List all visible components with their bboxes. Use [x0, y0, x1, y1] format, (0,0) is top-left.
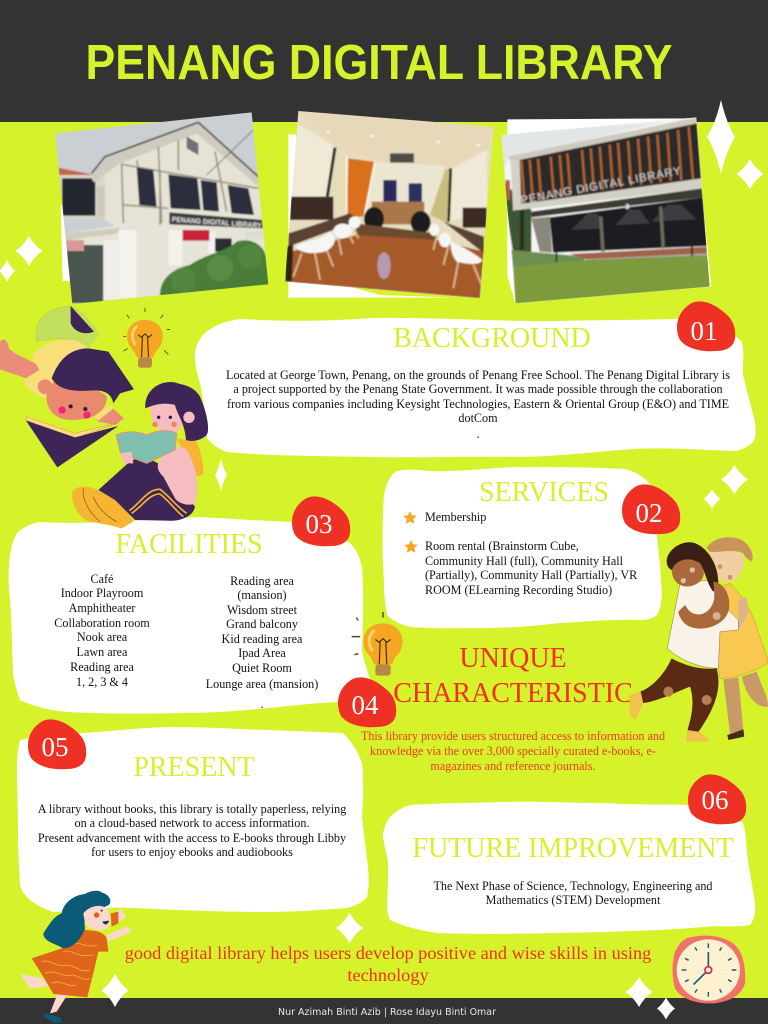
facilities list: column one: 1, 2, 3 & 4 [76, 675, 128, 689]
badge: 03: 03 [306, 509, 332, 539]
heading: unique characteristic: CHARACTERISTIC [393, 678, 633, 709]
present paragraph [38, 802, 347, 859]
background paragraph [226, 368, 730, 441]
background paragraph: dotCom [458, 411, 498, 425]
panel: unique characteristic [361, 643, 665, 773]
facilities list: column one: Collaboration room [54, 616, 150, 630]
panel: services [382, 467, 662, 628]
heading: unique characteristic [393, 643, 633, 709]
illustration: children reading [0, 306, 208, 528]
girl sitting with book [72, 382, 208, 528]
facilities list: column two: Lounge area (mansion) [206, 677, 318, 691]
closing message [125, 943, 651, 985]
service: room rental: Room rental (Brainstorm Cube, [425, 539, 579, 553]
badge: 02 [622, 484, 680, 534]
heading: background: BACKGROUND [393, 323, 591, 354]
facilities list: column two: Quiet Room [232, 661, 292, 675]
heading: future improvement: FUTURE IMPROVEMENT [412, 833, 734, 864]
present paragraph: for users to enjoy ebooks and audiobooks [91, 845, 293, 859]
unique characteristic paragraph [361, 729, 665, 773]
icon: lightbulb [352, 612, 403, 676]
closing message: technology [347, 965, 429, 985]
icon: clock [672, 936, 745, 1003]
facilities list: column two: Ipad Area [238, 646, 286, 660]
service: room rental [425, 539, 638, 597]
facilities list: column two: Wisdom street [227, 603, 298, 617]
badge: 02: 02 [636, 498, 662, 528]
photo: interior room [285, 111, 494, 298]
facilities list: column one: Reading area [70, 660, 134, 674]
panel: present [17, 727, 369, 912]
future improvement paragraph: The Next Phase of Science, Technology, Engineering and [434, 879, 712, 893]
panel: background [195, 318, 756, 457]
friend in yellow dress [707, 537, 768, 740]
panel: future improvement [383, 802, 755, 934]
icon: star bullet [403, 511, 417, 524]
heading: present: PRESENT [133, 752, 255, 783]
badge: 01: 01 [690, 316, 718, 346]
facilities list: column one: Lawn area [77, 645, 128, 659]
future improvement paragraph: Mathematics (STEM) Development [486, 893, 661, 907]
photo: modern library exterior: 3 [625, 202, 629, 211]
badge: 05: 05 [42, 732, 68, 762]
service: membership: Membership [425, 510, 486, 524]
service: room rental: Community Hall (full), Community Hall [425, 554, 624, 568]
friend in white shirt [629, 542, 748, 742]
facilities list: column one: Indoor Playroom [61, 586, 144, 600]
facilities list: column one: Café [91, 572, 113, 586]
boy lying with book [0, 306, 134, 467]
badge: 06 [688, 774, 746, 824]
future improvement paragraph [434, 879, 712, 907]
closing message: good digital library helps users develop positive and wise skills in using [125, 943, 651, 963]
present paragraph: A library without books, this library is totally paperless, relying [38, 802, 346, 816]
facilities list: column two: . [260, 697, 264, 711]
heading: services: SERVICES [479, 477, 609, 508]
title: PENANG DIGITAL LIBRARY [86, 36, 672, 90]
present paragraph: on a cloud-based network to access information. [75, 816, 309, 830]
panel: facilities [8, 517, 370, 714]
unique characteristic paragraph: knowledge via the over 3,000 specially curated e-books, e- [370, 744, 656, 758]
background paragraph: from various companies including Keysight Technologies, Eastern & Oriental Group (E&O) and TIME [227, 397, 729, 411]
service: room rental: ROOM (ELearning Recording Studio) [425, 583, 612, 597]
heading: unique characteristic: UNIQUE [459, 643, 567, 674]
sign text: PENANG DIGITAL LIBRARY [172, 215, 262, 230]
illustration: two friends hugging [629, 537, 768, 742]
illustration: running girl [20, 891, 132, 1023]
badge: 03 [292, 496, 350, 546]
badge: 06: 06 [702, 785, 728, 815]
credits: Nur Azimah Binti Azib | Rose Idayu Binti Omar [278, 1007, 497, 1018]
present paragraph: Present advancement with the access to E-books through Libby [38, 831, 347, 845]
sign text: PENANG DIGITAL LIBRARY [520, 165, 682, 207]
facilities list: column two: (mansion) [237, 588, 287, 602]
badge: 04 [338, 677, 396, 727]
heading: facilities: FACILITIES [115, 529, 263, 560]
facilities list: column two [206, 574, 318, 711]
background paragraph: Located at George Town, Penang, on the grounds of Penang Free School. The Penang Digital Library is [226, 368, 730, 382]
unique characteristic paragraph: This library provide users structured access to information and [361, 729, 665, 743]
badge: 05 [28, 719, 86, 769]
photo: heritage library building [50, 108, 273, 308]
service: room rental: (Partially), Community Hall (Partially), VR [425, 568, 638, 582]
background paragraph: . [476, 427, 480, 441]
icon: star bullet [404, 540, 418, 553]
icon: lightbulb [123, 308, 170, 368]
facilities list: column one [54, 572, 150, 689]
footer bar [0, 998, 768, 1024]
facilities list: column one: Amphitheater [69, 601, 135, 615]
badge: 04: 04 [352, 690, 379, 720]
facilities list: column two: Reading area [230, 574, 294, 588]
facilities list: column two: Grand balcony [226, 617, 299, 631]
facilities list: column one: Nook area [77, 630, 128, 644]
background paragraph: a project supported by the Penang State Government. It was made possible through the collaboration [233, 382, 723, 396]
unique characteristic paragraph: magazines and reference journals. [430, 759, 596, 773]
facilities list: column two: Kid reading area [222, 632, 303, 646]
header bar [0, 0, 768, 122]
photo: modern library exterior [501, 118, 712, 304]
badge: 01 [677, 301, 735, 351]
